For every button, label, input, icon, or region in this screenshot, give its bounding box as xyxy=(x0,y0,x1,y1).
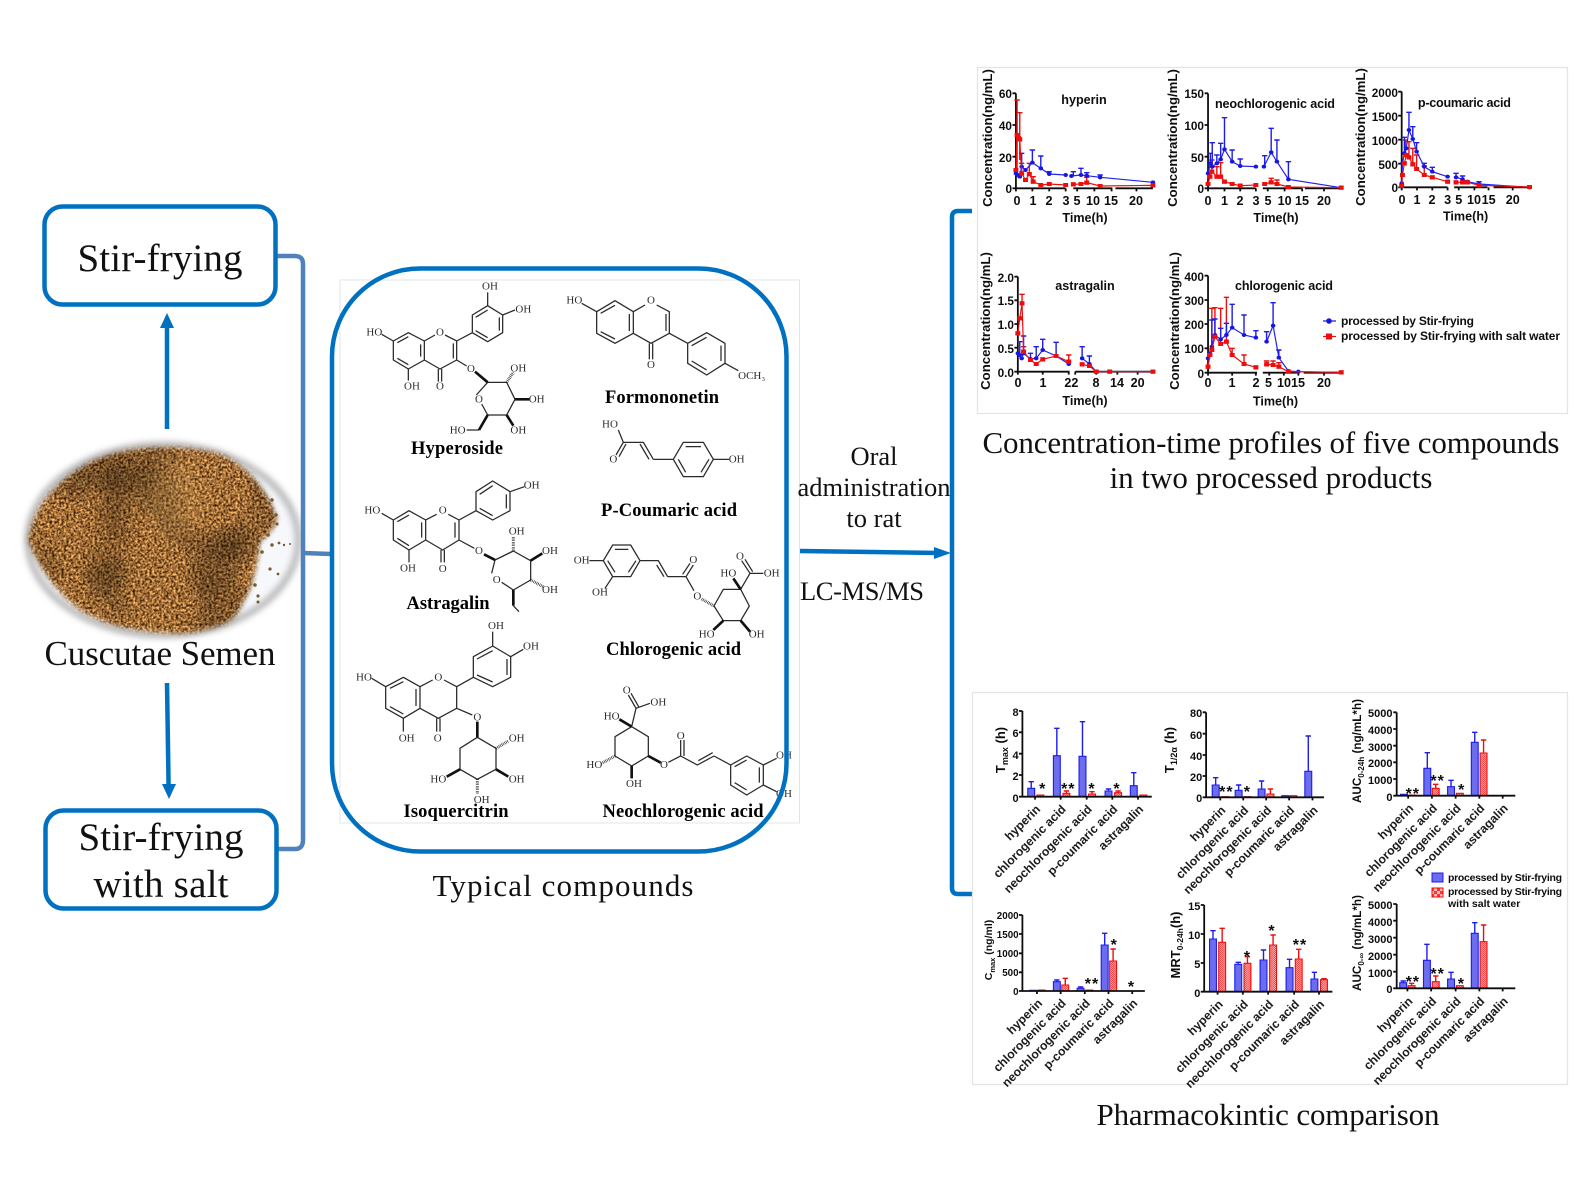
line chart: chlorogenic acid: 10 xyxy=(1277,376,1291,390)
molecule: Hyperoside and Astragalin structures: OH xyxy=(542,584,558,596)
bar chart: Cmax: 2000 xyxy=(997,911,1019,922)
molecule: Chlorogenic acid structure: O xyxy=(736,551,744,563)
bar chart: AUC 0-infinity: 0 xyxy=(1386,984,1392,996)
bar chart: AUC 0-24h: chlorogenic acid xyxy=(1362,801,1440,880)
line chart: p-coumaric acid: 10 xyxy=(1467,193,1481,207)
line chart: astragalin: 14 xyxy=(1110,376,1124,390)
label: Oral administration to rat: Oral xyxy=(850,441,898,471)
bar chart: Tmax xyxy=(990,707,1152,896)
line chart: neochlorogenic acid: 50 xyxy=(1191,151,1204,165)
bar chart: MRT: 5 xyxy=(1194,959,1200,971)
line chart: neochlorogenic acid: 100 xyxy=(1184,119,1204,133)
line chart: p-coumaric acid: 1000 xyxy=(1372,134,1398,148)
molecule: Isoquercitrin structure: OH xyxy=(509,732,525,744)
molecule: Hyperoside and Astragalin structures: OH xyxy=(529,393,545,405)
label: Oral administration to rat: to rat xyxy=(846,503,902,533)
bar chart: AUC 0-infinity: 0-∞ xyxy=(1357,953,1366,966)
line chart: hyperin: 10 xyxy=(1086,194,1100,208)
bar chart: Tmax: p-coumaric acid xyxy=(1044,802,1120,878)
line chart: hyperin xyxy=(980,69,1153,225)
arrow: up to Stir-frying xyxy=(160,313,174,429)
bar chart: T1/2α: * xyxy=(1244,784,1251,801)
line chart: chlorogenic acid: 0 xyxy=(1204,376,1212,390)
bar chart: Tmax: * xyxy=(1039,781,1046,798)
line chart: astragalin: Concentration(ng/mL) xyxy=(978,252,993,390)
molecule: Isoquercitrin structure: OH xyxy=(474,794,490,806)
molecule: Hyperoside and Astragalin structures: O xyxy=(439,563,447,575)
molecule: Hyperoside and Astragalin structures: O xyxy=(439,505,447,517)
molecule: Hyperoside and Astragalin structures: O xyxy=(475,393,483,405)
line chart: p-coumaric acid: Concentration(ng/mL) xyxy=(1353,68,1368,206)
bar chart: Cmax: 1000 xyxy=(997,949,1019,960)
line chart: chlorogenic acid: Concentration(ng/mL) xyxy=(1167,252,1182,390)
line chart: chlorogenic acid: 5 xyxy=(1265,376,1272,390)
line chart: p-coumaric acid: 0 xyxy=(1398,193,1406,207)
molecule: Hyperoside and Astragalin structures xyxy=(364,281,558,612)
bar chart: MRT: 0 xyxy=(1194,988,1200,1000)
panel: pharmacokinetic comparison xyxy=(972,692,1568,1091)
legend: bar charts: with salt water xyxy=(1447,898,1520,910)
bar chart: AUC 0-24h: p-coumaric acid xyxy=(1411,801,1487,877)
bar chart: MRT: 15 xyxy=(1188,901,1200,913)
box: Stir-frying with salt: Stir-frying xyxy=(78,816,244,859)
bar chart: Tmax: max xyxy=(1000,747,1010,765)
legend: line charts xyxy=(1323,314,1560,343)
label: Neochlorogenic acid: Neochlorogenic acid xyxy=(602,802,764,822)
molecule: Formononetin structure xyxy=(566,295,765,382)
line chart: hyperin: 3 xyxy=(1062,194,1070,208)
line chart: neochlorogenic acid: 2 xyxy=(1236,194,1244,208)
caption: concentration-time profiles xyxy=(982,425,1560,495)
molecule: Hyperoside and Astragalin structures: HO xyxy=(364,505,380,517)
molecule: Hyperoside and Astragalin structures: HO xyxy=(450,425,466,437)
line chart: astragalin: 1.5 xyxy=(998,294,1014,308)
bar chart: AUC 0-infinity: astragalin xyxy=(1460,994,1511,1045)
bar chart: Cmax: ** xyxy=(1085,976,1099,993)
bar chart: Cmax: p-coumaric acid xyxy=(1041,996,1117,1072)
bar chart: AUC 0-infinity: AUC xyxy=(1351,966,1364,991)
molecule: Chlorogenic acid structure: O xyxy=(689,554,697,566)
line chart: p-coumaric acid: 1 xyxy=(1413,193,1421,207)
molecule: Chlorogenic acid structure: O xyxy=(693,591,701,603)
line chart: hyperin: Concentration(ng/mL) xyxy=(980,69,995,207)
molecule: Chlorogenic acid structure: HO xyxy=(720,567,736,579)
line chart: astragalin: Time(h) xyxy=(1062,394,1108,408)
line chart: chlorogenic acid: 1 xyxy=(1228,376,1236,390)
molecule: Formononetin structure: HO xyxy=(566,295,582,307)
molecule: Chlorogenic acid structure: OH xyxy=(592,587,608,599)
line chart: chlorogenic acid: 100 xyxy=(1184,342,1204,356)
bar chart: T1/2α: 1/2α xyxy=(1169,747,1179,765)
molecule: Formononetin structure: OCH₃ xyxy=(738,370,765,382)
molecule: Isoquercitrin structure: O xyxy=(434,671,442,683)
bar chart: AUC 0-infinity: p-coumaric acid xyxy=(1411,994,1487,1070)
line chart: hyperin: 0 xyxy=(1005,182,1012,196)
line chart: hyperin: hyperin xyxy=(1061,93,1107,107)
molecule: Chlorogenic acid structure: OH xyxy=(749,628,765,640)
legend: line charts: processed by Stir-frying xyxy=(1341,314,1474,328)
molecule: Isoquercitrin structure xyxy=(356,620,539,806)
molecule: P-Coumaric acid structure: O xyxy=(609,453,617,465)
line chart: hyperin: Time(h) xyxy=(1062,211,1108,225)
bar chart: AUC 0-infinity: (ng/mL*h) xyxy=(1351,895,1364,953)
bar chart: MRT: 10 xyxy=(1188,930,1200,942)
bar chart: T1/2α xyxy=(1162,708,1324,897)
molecule: Isoquercitrin structure: OH xyxy=(488,620,504,632)
label: Chlorogenic acid: Chlorogenic acid xyxy=(606,640,742,660)
label: Hyperoside: Hyperoside xyxy=(411,439,503,459)
molecule: Hyperoside and Astragalin structures: O xyxy=(436,381,444,393)
bar chart: AUC 0-infinity: 2000 xyxy=(1368,951,1392,963)
frame: rounded blue border xyxy=(332,268,786,852)
molecule: Neochlorogenic acid structure: OH xyxy=(776,750,792,762)
line chart: neochlorogenic acid: 15 xyxy=(1295,194,1309,208)
line chart: p-coumaric acid: 0 xyxy=(1391,181,1398,195)
line chart: neochlorogenic acid: 5 xyxy=(1264,194,1272,208)
line chart: neochlorogenic acid: 10 xyxy=(1278,194,1292,208)
bar chart: T1/2α: (h) xyxy=(1162,727,1177,747)
bar chart: MRT: hyperin xyxy=(1185,997,1226,1038)
molecule: Hyperoside and Astragalin structures: O xyxy=(493,574,501,586)
bar chart: Tmax: * xyxy=(1088,781,1096,798)
molecule: Isoquercitrin structure: OH xyxy=(509,773,525,785)
bar chart: AUC 0-24h: 1000 xyxy=(1368,775,1392,787)
bar chart: T1/2α: T xyxy=(1162,765,1177,773)
line chart: astragalin: 1.0 xyxy=(998,318,1014,332)
molecule: Hyperoside and Astragalin structures: OH xyxy=(510,362,526,374)
line chart: neochlorogenic acid: 1 xyxy=(1221,194,1228,208)
bar chart: MRT: 0-24h xyxy=(1175,928,1185,950)
line chart: p-coumaric acid: 2 xyxy=(1428,193,1436,207)
molecule: Chlorogenic acid structure: OH xyxy=(764,567,780,579)
bar chart: AUC 0-infinity xyxy=(1351,895,1515,1088)
bar chart: AUC 0-24h: 3000 xyxy=(1368,742,1392,754)
line chart: hyperin: 15 xyxy=(1104,194,1118,208)
bar chart: Tmax: * xyxy=(1113,781,1121,798)
line chart: chlorogenic acid: 200 xyxy=(1184,318,1204,332)
line chart: astragalin: 2.0 xyxy=(998,271,1014,285)
bar chart: AUC 0-infinity: 1000 xyxy=(1368,968,1392,980)
molecule: P-Coumaric acid structure: OH xyxy=(729,453,745,465)
molecule: Formononetin structure: O xyxy=(647,295,655,307)
panel: typical compounds xyxy=(332,268,800,852)
label: Oral administration to rat xyxy=(798,441,950,533)
bar chart: Tmax: T xyxy=(993,765,1008,773)
bar chart: AUC 0-infinity: hyperin xyxy=(1374,994,1416,1035)
line chart: neochlorogenic acid: 20 xyxy=(1317,194,1331,208)
bar chart: AUC 0-24h: ** xyxy=(1430,773,1445,790)
bar chart: AUC 0-24h: 4000 xyxy=(1368,725,1392,737)
connector: bracket linking processed products xyxy=(276,256,331,849)
bar chart: T1/2α: 60 xyxy=(1190,730,1202,742)
line chart: p-coumaric acid: Time(h) xyxy=(1443,210,1488,224)
molecule: Hyperoside and Astragalin structures: OH xyxy=(404,381,420,393)
bar chart: Tmax: neochlorogenic acid xyxy=(1001,802,1095,896)
line chart: astragalin xyxy=(978,252,1153,408)
molecule: Hyperoside and Astragalin structures: OH xyxy=(515,304,531,316)
bar chart: Tmax: 6 xyxy=(1012,728,1019,740)
caption: concentration-time profiles: in two processed products xyxy=(1110,460,1432,495)
molecule: Neochlorogenic acid structure: HO xyxy=(604,711,620,723)
line chart: astragalin: 0.0 xyxy=(998,366,1014,380)
caption: pharmacokinetic comparison: Pharmacokintic comparison xyxy=(1096,1097,1440,1132)
bar chart: Cmax: neochlorogenic acid xyxy=(999,996,1093,1090)
bar chart: AUC 0-infinity: 5000 xyxy=(1368,900,1392,912)
legend: bar charts: processed by Stir-frying xyxy=(1448,872,1562,884)
bar chart: Cmax: astragalin xyxy=(1090,996,1140,1047)
bar chart: Tmax: astragalin xyxy=(1096,802,1146,853)
line chart: p-coumaric acid: 20 xyxy=(1506,193,1520,207)
bar chart: AUC 0-24h: 5000 xyxy=(1368,708,1392,720)
legend: bar charts xyxy=(1432,872,1562,910)
bar chart: AUC 0-24h: AUC xyxy=(1351,778,1364,803)
bar chart: T1/2α: 40 xyxy=(1190,751,1202,763)
bar chart: Cmax: (ng/ml) xyxy=(983,920,995,958)
bar chart: Cmax: 500 xyxy=(1002,968,1019,979)
molecule: Hyperoside and Astragalin structures: HO xyxy=(366,326,382,338)
line chart: hyperin: 20 xyxy=(1129,194,1143,208)
molecule: Hyperoside and Astragalin structures: OH xyxy=(542,545,558,557)
line chart: p-coumaric acid: 2000 xyxy=(1372,86,1398,100)
molecule: Hyperoside and Astragalin structures: OH xyxy=(524,480,540,492)
label: Astragalin: Astragalin xyxy=(406,594,490,614)
molecule: Isoquercitrin structure: O xyxy=(473,711,481,723)
molecule: Isoquercitrin structure: O xyxy=(434,732,442,744)
bar chart: AUC 0-24h: hyperin xyxy=(1375,801,1416,842)
molecule: Neochlorogenic acid structure: HO xyxy=(586,759,602,771)
line chart: astragalin: astragalin xyxy=(1055,279,1115,293)
line chart: neochlorogenic acid: 3 xyxy=(1252,194,1260,208)
bar chart: T1/2α: hyperin xyxy=(1187,803,1228,844)
bar chart: Tmax: chlorogenic acid xyxy=(990,802,1069,881)
caption: Cuscutae Semen: Cuscutae Semen xyxy=(44,634,276,673)
bar chart: MRT: chlorogenic acid xyxy=(1173,997,1251,1076)
bar chart: Tmax: 0 xyxy=(1012,793,1019,805)
molecule: Chlorogenic acid structure: OH xyxy=(574,555,590,567)
bar chart: T1/2α: astragalin xyxy=(1270,803,1321,854)
line chart: p-coumaric acid xyxy=(1353,68,1530,224)
box: Stir-frying: Stir-frying xyxy=(78,237,242,280)
bar chart: MRT: neochlorogenic acid xyxy=(1182,997,1276,1091)
line chart: p-coumaric acid: 15 xyxy=(1482,193,1496,207)
label: P-Coumaric acid: P-Coumaric acid xyxy=(601,501,738,521)
bar chart: AUC 0-infinity: neochlorogenic acid xyxy=(1370,994,1464,1088)
bar chart: Cmax: 1500 xyxy=(997,930,1019,941)
bar chart: AUC 0-24h xyxy=(1351,699,1515,895)
legend: bar charts: processed by Stir-frying xyxy=(1448,886,1562,898)
line chart: hyperin: 60 xyxy=(999,87,1012,101)
molecule: Isoquercitrin structure: OH xyxy=(523,641,539,653)
molecule: P-Coumaric acid structure xyxy=(602,418,745,477)
bar chart: MRT xyxy=(1168,901,1332,1091)
line chart: chlorogenic acid: 15 xyxy=(1291,376,1305,390)
line chart: p-coumaric acid: p-coumaric acid xyxy=(1418,96,1511,110)
line chart: chlorogenic acid: 400 xyxy=(1184,270,1204,284)
line chart: neochlorogenic acid: Concentration(ng/mL) xyxy=(1165,69,1180,207)
label: LC-MS/MS: LC-MS/MS xyxy=(800,576,924,606)
line chart: hyperin: 2 xyxy=(1045,194,1053,208)
line chart: astragalin: 1 xyxy=(1039,376,1047,390)
molecule: Neochlorogenic acid structure: O xyxy=(677,730,685,742)
line chart: chlorogenic acid: Time(h) xyxy=(1253,395,1298,409)
line chart: p-coumaric acid: 3 xyxy=(1444,193,1451,207)
bar chart: MRT: p-coumaric acid xyxy=(1226,997,1302,1073)
bar chart: MRT: astragalin xyxy=(1277,997,1327,1048)
bar chart: AUC 0-24h: neochlorogenic acid xyxy=(1370,801,1464,895)
molecule: Neochlorogenic acid structure xyxy=(586,685,792,800)
bar chart: T1/2α: 80 xyxy=(1190,708,1202,720)
line chart: hyperin: 1 xyxy=(1029,194,1037,208)
bar chart: MRT: * xyxy=(1268,923,1276,940)
caption: concentration-time profiles: Concentration-time profiles of five compounds xyxy=(982,425,1560,460)
line chart: hyperin: 0 xyxy=(1013,194,1021,208)
line chart: neochlorogenic acid xyxy=(1165,69,1341,225)
label: Isoquercitrin: Isoquercitrin xyxy=(404,802,509,822)
molecule: Isoquercitrin structure: OH xyxy=(399,732,415,744)
bar chart: T1/2α: chlorogenic acid xyxy=(1173,803,1251,882)
bar chart: Tmax: 2 xyxy=(1012,771,1019,783)
line chart: chlorogenic acid: 2 xyxy=(1252,376,1260,390)
molecule: Chlorogenic acid structure: HO xyxy=(699,628,715,640)
panel: concentration-time profiles xyxy=(978,68,1568,414)
bar chart: MRT: (h) xyxy=(1168,912,1183,928)
arrow: compounds to results xyxy=(800,547,951,559)
molecule: Isoquercitrin structure: HO xyxy=(356,671,372,683)
bar chart: AUC 0-infinity: 4000 xyxy=(1368,917,1392,929)
caption: Typical compounds: Typical compounds xyxy=(432,868,694,903)
molecule: Neochlorogenic acid structure: OH xyxy=(626,778,642,790)
line chart: chlorogenic acid: 300 xyxy=(1184,294,1204,308)
line chart: neochlorogenic acid: 0 xyxy=(1204,194,1212,208)
molecule: Hyperoside and Astragalin structures: O xyxy=(436,327,444,339)
molecule: Neochlorogenic acid structure: O xyxy=(660,759,668,771)
bar chart: AUC 0-24h: ** xyxy=(1406,786,1420,803)
bar chart: AUC 0-24h: (ng/mL*h) xyxy=(1351,699,1364,757)
image: Cuscutae Semen seeds xyxy=(20,436,298,642)
line chart: chlorogenic acid: 0 xyxy=(1197,367,1204,381)
molecule: Hyperoside and Astragalin structures: OH xyxy=(510,425,526,437)
line chart: astragalin: 22 xyxy=(1064,376,1078,390)
bar chart: Cmax: 0 xyxy=(1013,987,1019,998)
line chart: astragalin: 0 xyxy=(1014,376,1022,390)
line chart: neochlorogenic acid: 150 xyxy=(1184,87,1204,101)
box: Stir-frying xyxy=(44,206,276,304)
bar chart: T1/2α: 0 xyxy=(1196,793,1202,805)
molecule: Hyperoside and Astragalin structures: OH xyxy=(509,526,525,538)
line chart: chlorogenic acid: 20 xyxy=(1317,376,1331,390)
molecule: Hyperoside and Astragalin structures: OH xyxy=(400,562,416,574)
bar chart: AUC 0-24h: 0-24h xyxy=(1357,757,1366,778)
box: Stir-frying with salt: with salt xyxy=(94,863,229,906)
line chart: neochlorogenic acid: 0 xyxy=(1197,182,1204,196)
bar chart: Cmax: * xyxy=(1128,979,1135,996)
label: Formononetin: Formononetin xyxy=(605,388,720,408)
molecule: P-Coumaric acid structure: HO xyxy=(602,418,618,430)
molecule: Neochlorogenic acid structure: O xyxy=(623,685,631,697)
bar chart: Tmax: (h) xyxy=(993,727,1008,747)
bar chart: Cmax: * xyxy=(1111,937,1118,954)
bar chart: AUC 0-infinity: ** xyxy=(1430,966,1445,983)
molecule: Chlorogenic acid structure xyxy=(574,545,780,640)
bar chart: AUC 0-24h: 0 xyxy=(1386,792,1392,804)
line chart: chlorogenic acid: chlorogenic acid xyxy=(1235,279,1333,293)
line chart: hyperin: 5 xyxy=(1073,194,1081,208)
bar chart: AUC 0-24h: astragalin xyxy=(1460,801,1511,852)
bar chart: Tmax: hyperin xyxy=(1002,802,1043,843)
line chart: astragalin: 8 xyxy=(1092,376,1100,390)
molecule: Neochlorogenic acid structure: OH xyxy=(650,696,666,708)
molecule: Hyperoside and Astragalin structures: O xyxy=(467,363,475,375)
bar chart: AUC 0-24h: * xyxy=(1458,782,1465,799)
bar chart: T1/2α: p-coumaric acid xyxy=(1221,803,1297,879)
bar chart: Tmax: 8 xyxy=(1012,707,1019,719)
label: Oral administration to rat: administration xyxy=(798,472,950,502)
legend: line charts: processed by Stir-frying with salt water xyxy=(1341,329,1560,343)
line chart: hyperin: 40 xyxy=(999,119,1012,133)
bar chart: Cmax xyxy=(983,911,1145,1090)
bar chart: AUC 0-infinity: * xyxy=(1458,976,1465,993)
bracket: results xyxy=(952,211,972,894)
bar chart: AUC 0-infinity: chlorogenic acid xyxy=(1361,994,1439,1073)
line chart: p-coumaric acid: 500 xyxy=(1378,158,1398,172)
line chart: chlorogenic acid xyxy=(1167,252,1341,409)
bar chart: Tmax: 4 xyxy=(1012,750,1019,762)
bar chart: Cmax: max xyxy=(988,957,997,973)
bar chart: T1/2α: 20 xyxy=(1190,772,1202,784)
line chart: astragalin: 0.5 xyxy=(998,342,1014,356)
line chart: p-coumaric acid: 1500 xyxy=(1372,110,1398,124)
bar chart: Cmax: hyperin xyxy=(1004,996,1045,1037)
molecule: Hyperoside and Astragalin structures: O xyxy=(475,545,483,557)
bar chart: MRT: ** xyxy=(1293,937,1307,954)
bar chart: T1/2α: ** xyxy=(1219,784,1234,801)
line chart: neochlorogenic acid: Time(h) xyxy=(1253,211,1299,225)
line chart: astragalin: 20 xyxy=(1131,376,1145,390)
bar chart: AUC 0-24h: 2000 xyxy=(1368,758,1392,770)
molecule: Isoquercitrin structure: HO xyxy=(430,773,446,785)
bar chart: MRT: * xyxy=(1244,949,1251,966)
bar chart: MRT: MRT xyxy=(1168,950,1183,978)
line chart: hyperin: 20 xyxy=(999,151,1012,165)
bar chart: T1/2α: neochlorogenic acid xyxy=(1181,803,1274,897)
molecule: Formononetin structure: O xyxy=(647,359,655,371)
molecule: Neochlorogenic acid structure: OH xyxy=(776,788,792,800)
bar chart: Tmax: ** xyxy=(1061,781,1076,798)
bar chart: Cmax: chlorogenic acid xyxy=(990,996,1069,1075)
bar chart: AUC 0-infinity: ** xyxy=(1406,974,1420,991)
bar chart: AUC 0-infinity: 3000 xyxy=(1368,934,1392,946)
line chart: p-coumaric acid: 5 xyxy=(1455,193,1462,207)
molecule: Hyperoside and Astragalin structures: OH xyxy=(482,281,498,293)
bar chart: Cmax: C xyxy=(983,973,995,980)
arrow: down to Stir-frying with salt xyxy=(162,683,176,799)
box: Stir-frying with salt xyxy=(46,810,276,908)
line chart: neochlorogenic acid: neochlorogenic acid xyxy=(1215,97,1335,111)
